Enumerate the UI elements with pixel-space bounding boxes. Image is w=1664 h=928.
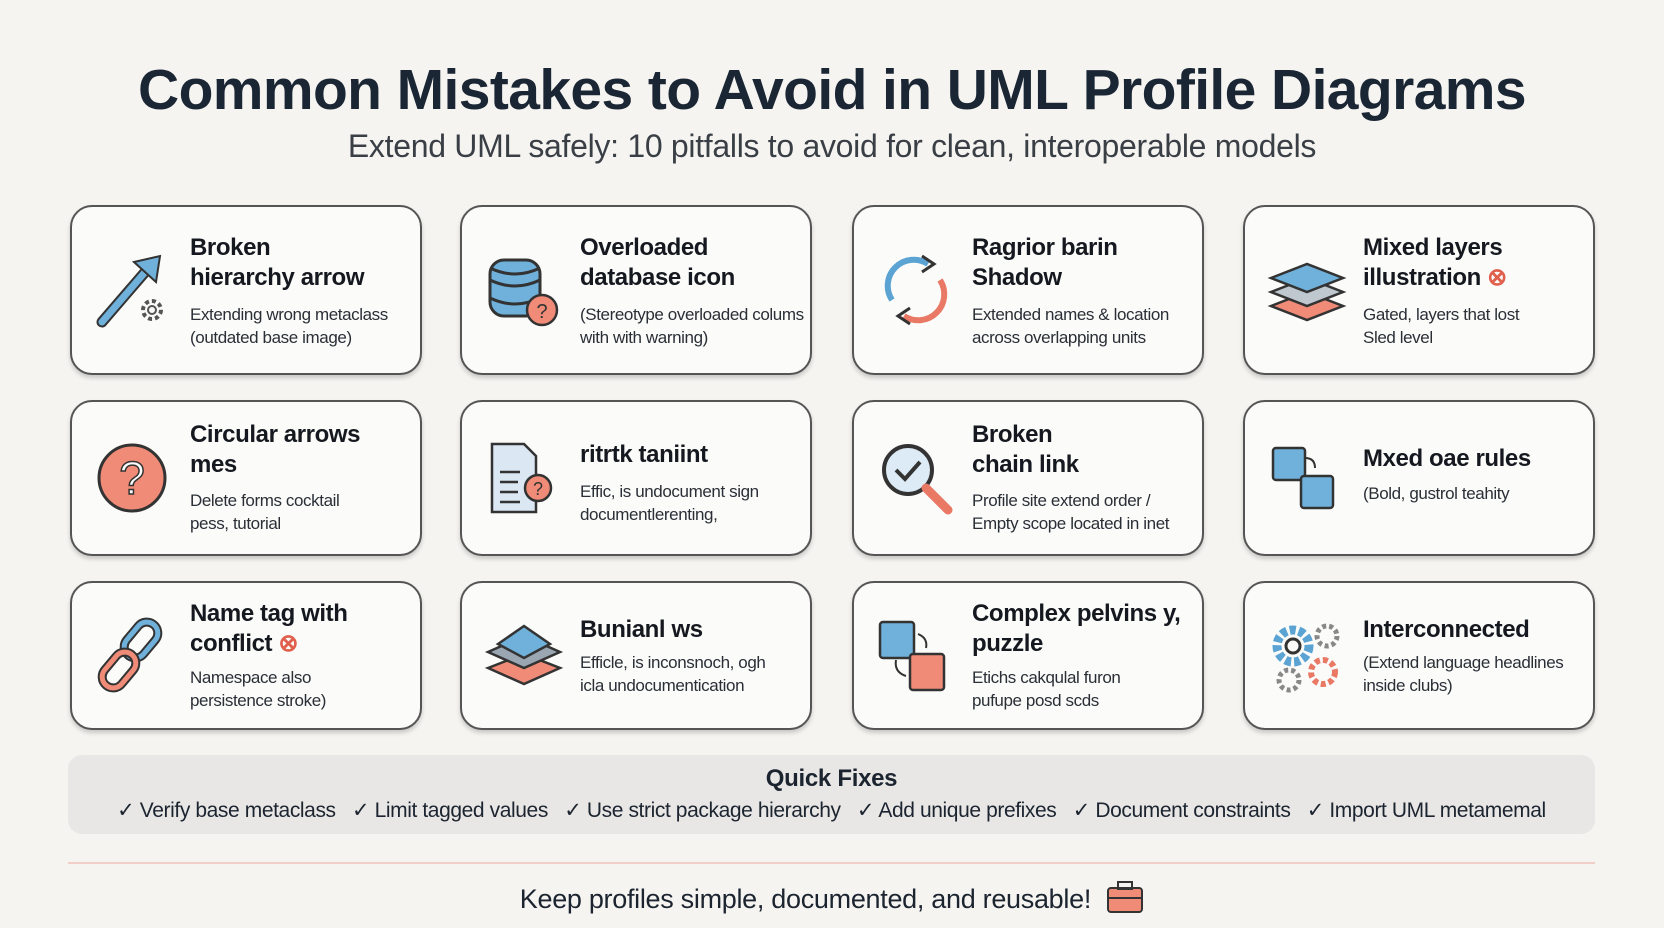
text: Gated, layers that lost [1363, 305, 1519, 324]
heading: Bunianl ws [580, 616, 703, 643]
icon: gears [1272, 624, 1340, 692]
quick fixes panel [68, 755, 1595, 834]
text [580, 305, 804, 347]
text: (Bold, gustrol teahity [1363, 484, 1509, 503]
icon: mixed layers [1268, 262, 1346, 322]
text [1363, 653, 1564, 695]
card 7 [852, 400, 1204, 556]
text: (Extend language headlines [1363, 653, 1563, 672]
text: pess, tutorial [190, 514, 281, 533]
icon: puzzle [1272, 446, 1334, 510]
heading: Mxed oae rules [1363, 445, 1531, 472]
icon: broken arrow with gear [96, 254, 163, 328]
heading: mes [190, 451, 237, 478]
card 8 [1243, 400, 1595, 556]
text: Extending wrong metaclass [190, 305, 388, 324]
text: Efficle, is inconsnoch, ogh [580, 653, 765, 672]
text [580, 653, 765, 695]
card 9 [70, 581, 422, 730]
text: Extended names & location [972, 305, 1169, 324]
title: Common Mistakes to Avoid in UML Profile Diagrams [138, 58, 1526, 122]
text: (Stereotype overloaded colums [580, 305, 804, 324]
heading [972, 421, 1080, 478]
text: Namespace also [190, 668, 311, 687]
icon: magnifier with check [882, 444, 952, 514]
text [190, 305, 388, 347]
footer message: Keep profiles simple, documented, and reusable! [520, 884, 1091, 914]
heading: ritrtk taniint [580, 441, 708, 468]
icon: circular arrows [884, 254, 948, 326]
text: Etichs cakqulal furon [972, 668, 1120, 687]
text: Delete forms cocktail [190, 491, 339, 510]
subtitle: Extend UML safely: 10 pitfalls to avoid for clean, interoperable models [348, 128, 1316, 164]
text: Profile site extend order / [972, 491, 1150, 510]
text: pufupe posd scds [972, 691, 1099, 710]
heading: database icon [580, 264, 735, 291]
text [190, 668, 326, 710]
icon: document with warning [490, 442, 552, 514]
card 4 [1243, 205, 1595, 375]
heading [1363, 234, 1507, 291]
quick fixes heading: Quick Fixes [766, 765, 897, 792]
text [580, 482, 759, 524]
icon: puzzle pieces [878, 620, 946, 692]
text: Effic, is undocument sign [580, 482, 759, 501]
text: Sled level [1363, 328, 1433, 347]
heading: Interconnected [1363, 616, 1529, 643]
text: documentlerenting, [580, 505, 717, 524]
heading: Complex pelvins y, [972, 600, 1180, 627]
text: Empty scope located in inet [972, 514, 1169, 533]
card 12 [1243, 581, 1595, 730]
text: icla undocumentication [580, 676, 744, 695]
text [972, 305, 1169, 347]
heading: hierarchy arrow [190, 264, 364, 291]
text: across overlapping units [972, 328, 1146, 347]
icon: question circle: ? [119, 452, 145, 504]
text [1363, 305, 1520, 347]
card 6 [460, 400, 812, 556]
heading: illustration ⊗ [1363, 264, 1507, 291]
heading: Shadow [972, 264, 1062, 291]
card 1 [70, 205, 422, 375]
card 5 [70, 400, 422, 556]
heading: Broken [190, 234, 270, 261]
icon: question circle [98, 444, 166, 512]
heading [190, 421, 360, 478]
text [972, 668, 1120, 710]
text [190, 491, 339, 533]
quick fixes list: ✓ Verify base metaclass ✓ Limit tagged values ✓ Use strict package hierarchy ✓ Add unique prefixes ✓ Document constraints ✓ Import UML metamemal [117, 799, 1546, 822]
heading [580, 234, 735, 291]
heading [190, 600, 348, 657]
card 3 [852, 205, 1204, 375]
card 11 [852, 581, 1204, 730]
icon: database with warning [488, 258, 558, 326]
text: (outdated base image) [190, 328, 352, 347]
heading: Mixed layers [1363, 234, 1502, 261]
text: inside clubs) [1363, 676, 1452, 695]
heading: chain link [972, 451, 1079, 478]
heading: Circular arrows [190, 421, 360, 448]
icon: chain link [98, 618, 162, 692]
heading [972, 234, 1118, 291]
icon: stacked layers [484, 624, 564, 686]
icon: database with warning: ? [536, 301, 548, 323]
heading: conflict ⊗ [190, 630, 298, 657]
card 2 [460, 205, 812, 375]
heading [190, 234, 365, 291]
heading [972, 600, 1180, 657]
heading: puzzle [972, 630, 1043, 657]
heading: Broken [972, 421, 1052, 448]
text: persistence stroke) [190, 691, 326, 710]
text [972, 491, 1170, 533]
card 10 [460, 581, 812, 730]
icon: document with warning: ? [533, 479, 543, 499]
text: with with warning) [580, 328, 708, 347]
heading: Name tag with [190, 600, 348, 627]
heading: Ragrior barin [972, 234, 1118, 261]
heading: Overloaded [580, 234, 708, 261]
